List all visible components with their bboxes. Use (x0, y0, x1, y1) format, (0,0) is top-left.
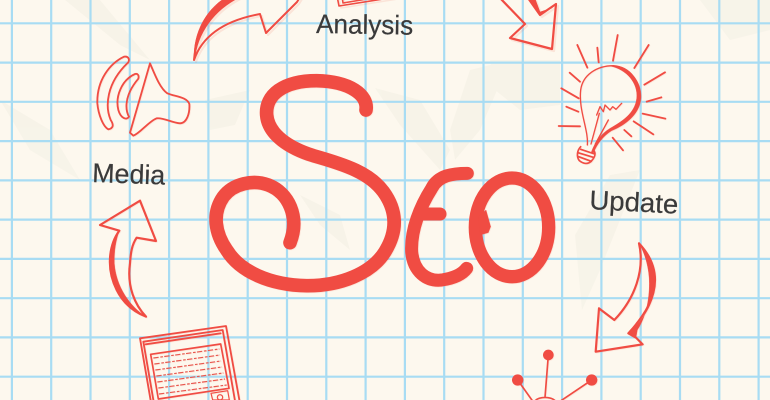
bulb glass (580, 66, 640, 153)
arrow: top right (500, 0, 556, 49)
node dots (512, 350, 597, 386)
filament (591, 103, 622, 144)
arrow: lower left (100, 201, 156, 317)
bulb rays (559, 35, 665, 150)
speaker cone (130, 63, 189, 136)
bulb base (577, 147, 595, 163)
screen area (151, 344, 229, 399)
arrow: lower right (596, 243, 655, 352)
label: Update: Update (589, 185, 679, 220)
SEO title lettering (216, 81, 549, 286)
small badge (211, 391, 229, 400)
label: Media: Media (92, 158, 167, 191)
label: Analysis: Analysis (316, 9, 413, 41)
inner sound wave (117, 74, 139, 119)
node links (518, 355, 592, 400)
letter E (412, 173, 467, 280)
arrow: top left (194, 0, 302, 60)
page frame (140, 326, 241, 400)
icon: light bulb (559, 35, 665, 163)
icon: analysis chart corner (337, 0, 402, 6)
text rows (153, 349, 227, 394)
icon: network nodes (512, 350, 597, 400)
outer sound wave (97, 57, 129, 129)
letter S (216, 81, 394, 286)
icon: megaphone (97, 57, 189, 136)
letter O (475, 178, 549, 277)
icon: web page screen (140, 326, 241, 400)
bulb thick edge (591, 66, 641, 153)
